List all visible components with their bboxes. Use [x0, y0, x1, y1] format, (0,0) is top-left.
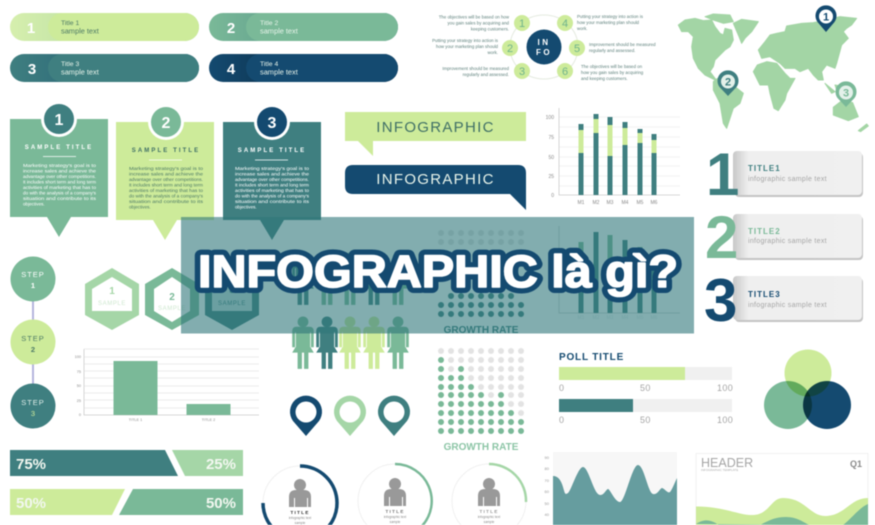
progress bar: 50 / 50: 50% — [16, 495, 46, 512]
pin icon: teal — [378, 396, 410, 436]
pin: map marker 2: 2 — [725, 76, 731, 88]
bar chart: two titles: TITLE 1 — [129, 418, 142, 422]
diagram: info hub with six numbered nodes: IN — [538, 38, 550, 47]
panel: sample box 1: activities of marketing that has to — [23, 185, 96, 190]
area chart: 50 — [545, 501, 550, 506]
diagram: info hub with six numbered nodes: 1 — [519, 18, 525, 30]
title card 1: 1 — [706, 141, 739, 208]
title card 2 — [705, 204, 863, 271]
title card 1 — [706, 141, 863, 208]
hexagon 3: 3 — [229, 285, 235, 296]
panel: sample box 3: activities of marketing that has to — [235, 188, 309, 193]
hexagon 3 — [205, 268, 259, 330]
hexagon 2: SAMPLE — [158, 306, 186, 312]
progress bar: 50 / 50: 50% — [206, 495, 236, 512]
ring stat 2: sample — [390, 520, 400, 524]
area chart: 70 — [545, 478, 550, 483]
hexagon 1 — [85, 268, 139, 330]
stacked bar chart: 25 — [548, 174, 554, 180]
bar chart: two titles: 25 — [77, 399, 81, 403]
banner overlay — [181, 217, 694, 334]
step 1 — [10, 256, 56, 302]
ring stat 3 — [452, 464, 526, 525]
panel: sample box 2: SAMPLE TITLE — [132, 148, 200, 154]
panel: sample box 3: Marketing strategy's goal is to — [235, 166, 310, 171]
poll: POLL TITLE — [559, 352, 624, 363]
stacked bar chart — [546, 108, 680, 206]
header card with layered area: INFOGRAPHIC TEMPLATE — [701, 468, 738, 472]
title card 2: 2 — [705, 204, 738, 271]
dot matrix: growth rate lower: GROWTH RATE — [444, 442, 519, 453]
ring stat 2: TITLE — [385, 509, 405, 515]
diagram: info hub with six numbered nodes: 3 — [519, 66, 525, 78]
stacked bar chart: 0 — [551, 193, 554, 199]
diagram: info hub with six numbered nodes — [432, 14, 656, 81]
panel: sample box 1: objectives. — [23, 202, 45, 206]
dot matrix: growth rate lower — [438, 348, 524, 453]
panel: sample box 1 — [10, 101, 108, 237]
ring stat 1 — [263, 466, 337, 525]
ring stat 1: TITLE — [290, 510, 310, 516]
panel: sample box 3: increase sales and achieve the — [235, 172, 310, 176]
header card with layered area: Q1 — [850, 459, 862, 469]
panel: sample box 2: objectives. — [129, 204, 151, 210]
panel: sample box 1: SAMPLE TITLE — [25, 145, 93, 151]
bar chart: two titles: 50 — [77, 384, 81, 388]
area chart — [545, 452, 677, 525]
step 3: 3 — [31, 409, 35, 418]
diagram: info hub with six numbered nodes: The objectives will be based on how — [439, 14, 510, 20]
stacked bar chart behind banner: M4 — [622, 315, 629, 321]
step 2 — [10, 320, 56, 364]
bar chart: two titles — [75, 349, 259, 422]
pill: title 4: 4 — [227, 61, 236, 78]
diagram: info hub with six numbered nodes: work. — [577, 26, 588, 31]
panel: sample box 3: SAMPLE TITLE — [238, 148, 306, 154]
dot matrix: growth rate behind banner: GROWTH RATE — [444, 325, 519, 336]
step 1: STEP — [21, 270, 45, 279]
diagram: info hub with six numbered nodes: how your marketing plan should — [577, 20, 640, 25]
stacked bar chart behind banner: M2 — [593, 315, 600, 321]
stacked bar chart: M2 — [593, 200, 600, 206]
ring stat 1: sample — [295, 521, 305, 525]
diagram: info hub with six numbered nodes: 6 — [562, 66, 568, 78]
speech bubble: light green infographic — [345, 112, 526, 156]
pin: map marker 3: 3 — [843, 88, 849, 100]
ring stat 1: infographic text — [289, 516, 311, 520]
panel: sample box 2: activities of marketing that has to — [129, 188, 203, 193]
step 3: STEP — [21, 398, 45, 407]
hexagon 2 — [145, 268, 199, 330]
pill: title 4: Title 4 — [260, 61, 278, 68]
ring stat 2: infographic text — [384, 515, 406, 519]
bar chart: two titles: 100 — [75, 355, 81, 359]
pill: title 1 — [10, 13, 199, 41]
pill: title 3: Title 3 — [61, 61, 79, 68]
area chart: 40 — [545, 512, 550, 517]
stacked bar chart behind banner: M6 — [651, 315, 658, 321]
panel: sample box 3: do with the analysis of a company's — [235, 194, 310, 198]
diagram: info hub with six numbered nodes: how you gain sales by acquiring — [581, 70, 644, 75]
stacked bar chart: M6 — [651, 200, 658, 206]
poll: 0 — [559, 415, 564, 425]
panel: sample box 3: 3 — [268, 115, 277, 132]
poll — [559, 352, 733, 425]
progress bar: 75 / 25: 75% — [16, 456, 46, 473]
title card 3: 3 — [704, 267, 737, 334]
step flow — [10, 256, 56, 428]
step 2: 2 — [31, 345, 35, 354]
area chart: 60 — [545, 489, 550, 494]
people pictogram: lower row — [292, 316, 409, 369]
poll: 100 — [717, 415, 733, 425]
panel: sample box 1: Marketing strategy's goal is to — [23, 163, 97, 168]
pill: title 1: sample text — [61, 26, 99, 36]
ring stat 3: infographic text — [478, 515, 500, 519]
banner title: INFOGRAPHIC là gì? — [198, 246, 678, 297]
panel: sample box 2: It includes short term and long term — [129, 182, 203, 188]
stacked bar chart behind banner: M3 — [607, 315, 614, 321]
diagram: info hub with six numbered nodes: regularly and assessed. — [463, 72, 509, 77]
title card 1: TITLE1 — [748, 164, 781, 173]
pill: title 2: 2 — [227, 20, 235, 37]
panel: sample box 2: situation and contribute to its — [129, 199, 204, 204]
title card 3: infographic sample text — [748, 302, 827, 309]
stacked bar chart: M4 — [622, 200, 629, 206]
diagram: info hub with six numbered nodes: work. — [488, 50, 498, 55]
stacked bar chart: 75 — [548, 135, 554, 141]
panel: sample box 2 — [116, 104, 214, 240]
diagram: info hub with six numbered nodes: FO — [536, 48, 552, 57]
panel: sample box 1: advantage over other competitions. — [23, 174, 96, 179]
diagram: info hub with six numbered nodes: Improvement should be measured — [589, 42, 656, 47]
pill: title 4 — [209, 54, 398, 82]
bar chart: two titles: 75 — [77, 370, 81, 374]
poll: 50 — [640, 415, 651, 425]
stacked bar chart behind banner: M1 — [578, 315, 585, 321]
pill: title 4: sample text — [260, 68, 298, 76]
world map with pins — [678, 5, 868, 132]
stacked bar chart: M1 — [578, 200, 585, 206]
stacked bar chart: 50 — [548, 155, 554, 161]
poll: 100 — [717, 383, 733, 393]
panel: sample box 2: do with the analysis of a company's — [129, 194, 204, 198]
panel: sample box 1: 1 — [55, 112, 64, 129]
pill: title 2 — [209, 13, 398, 41]
panel: sample box 3 — [223, 104, 321, 240]
diagram: info hub with six numbered nodes: Putting your strategy into action is — [432, 38, 499, 43]
pill: title 2: sample text — [260, 26, 298, 36]
hexagon 3: SAMPLE — [218, 301, 246, 307]
panel: sample box 1: situation and contribute to its — [23, 196, 97, 201]
stacked bar chart behind banner: M5 — [637, 315, 644, 321]
panel: sample box 2: 2 — [162, 115, 171, 132]
header card with layered area — [696, 454, 868, 525]
poll: 50 — [640, 383, 651, 393]
area chart: 80 — [545, 466, 550, 471]
title card 3 — [704, 267, 863, 334]
pin: map marker 2 — [718, 70, 738, 96]
diagram: info hub with six numbered nodes: The objectives will be based on — [581, 64, 643, 69]
pill: title 3: sample text — [61, 68, 99, 76]
pill: title 2: Title 2 — [260, 20, 278, 27]
hexagon 1: 1 — [109, 286, 115, 297]
stacked bar chart: M3 — [607, 200, 614, 206]
diagram: info hub with six numbered nodes: 4 — [562, 18, 568, 30]
pill: title 3 — [10, 54, 199, 82]
step 1: 1 — [31, 281, 35, 290]
pill: title 3: 3 — [28, 61, 36, 78]
pill: title 1: 1 — [27, 20, 35, 37]
ring stat 3: sample — [484, 520, 494, 524]
panel: sample box 2: increase sales and achieve the — [129, 172, 204, 176]
panel: sample box 3: objectives. — [235, 204, 257, 210]
venn diagram — [764, 350, 851, 429]
panel: sample box 2: Marketing strategy's goal is to — [129, 166, 204, 171]
progress bar: 50 / 50 — [10, 489, 243, 515]
title card 3: TITLE3 — [748, 290, 781, 299]
bar chart: two titles: 0 — [79, 413, 81, 417]
pill: title 1: Title 1 — [61, 20, 79, 27]
stacked bar chart: M5 — [637, 200, 644, 206]
speech bubble: light green infographic: INFOGRAPHIC — [376, 119, 495, 136]
diagram: info hub with six numbered nodes: keeping customers. — [471, 26, 509, 32]
progress bar: 75 / 25 — [10, 450, 243, 476]
dot matrix: growth rate behind banner — [438, 230, 524, 336]
speech bubble: navy infographic — [345, 165, 526, 210]
panel: sample box 1: It includes short term and long term — [23, 180, 96, 184]
progress bar: 75 / 25: 25% — [206, 456, 236, 473]
people pictogram: upper row behind banner — [292, 252, 409, 305]
panel: sample box 1: increase sales and achieve the — [23, 168, 97, 174]
hexagon 2: 2 — [169, 292, 175, 303]
diagram: info hub with six numbered nodes: Improvement should be measured — [442, 66, 510, 71]
hexagon 1: SAMPLE — [98, 301, 126, 307]
title card 1: infographic sample text — [748, 176, 827, 183]
ring stat 2 — [358, 464, 432, 525]
panel: sample box 3: situation and contribute to its — [235, 199, 310, 204]
panel: sample box 3: It includes short term and long term — [235, 182, 309, 188]
diagram: info hub with six numbered nodes: you gain sales by acquiring and — [447, 20, 510, 26]
pin: map marker 3 — [835, 81, 856, 107]
bar chart: two titles: TITLE 2 — [202, 418, 215, 422]
step 3 — [10, 384, 56, 428]
diagram: info hub with six numbered nodes: Putting your strategy into action is — [577, 14, 644, 19]
area chart: 90 — [545, 455, 550, 460]
ring stat 3: TITLE — [479, 509, 499, 515]
stacked bar chart behind banner — [559, 226, 680, 321]
title card 2: TITLE2 — [748, 227, 781, 236]
panel: sample box 2: advantage over other competitions. — [129, 177, 203, 182]
diagram: info hub with six numbered nodes: how your marketing plan should — [436, 44, 499, 49]
pin: map marker 1 — [816, 5, 837, 32]
speech bubble: navy infographic: INFOGRAPHIC — [376, 171, 495, 188]
step 2: STEP — [21, 334, 45, 343]
panel: sample box 3: advantage over other competitions. — [235, 177, 309, 182]
diagram: info hub with six numbered nodes: regularly and assessed. — [589, 48, 635, 53]
panel: sample box 1: do with the analysis of a company's — [23, 190, 97, 196]
poll: 0 — [559, 383, 564, 393]
pin icon: navy — [290, 396, 322, 436]
stacked bar chart: 100 — [546, 115, 554, 121]
header card with layered area: HEADER — [701, 456, 753, 470]
title card 2: infographic sample text — [748, 238, 827, 245]
diagram: info hub with six numbered nodes: 5 — [574, 43, 580, 55]
pin: map marker 1: 1 — [823, 12, 829, 24]
pin icon: light green — [334, 396, 366, 436]
diagram: info hub with six numbered nodes: 2 — [507, 43, 513, 55]
diagram: info hub with six numbered nodes: and keeping customers. — [581, 76, 628, 81]
banner title: INFOGRAPHIC là gì? — [198, 246, 678, 297]
